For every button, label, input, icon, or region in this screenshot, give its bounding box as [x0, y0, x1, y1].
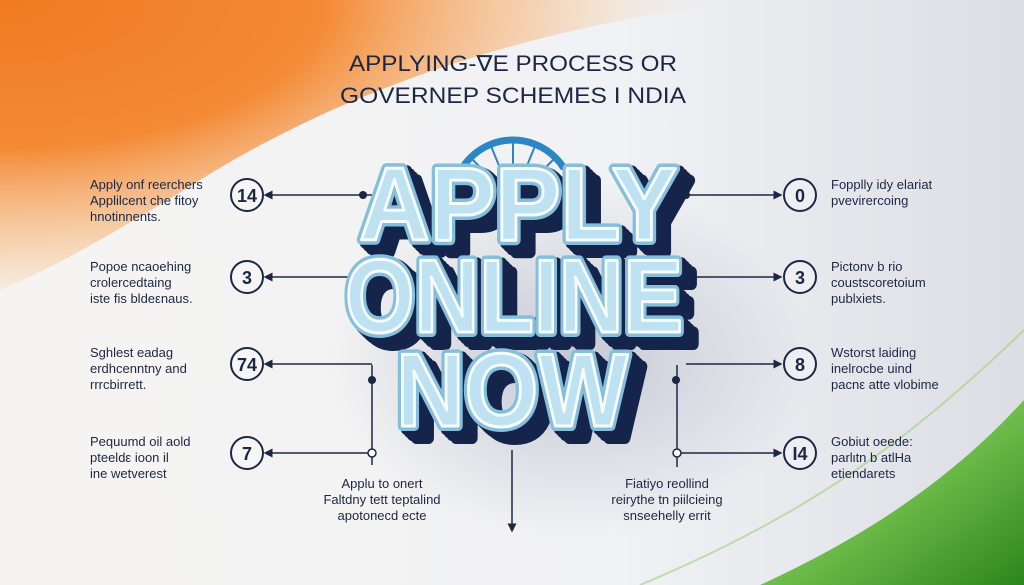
- headline: APPLY ONLINE NOW: ONLINE: [345, 239, 683, 355]
- left step texts: crolercedtaing: [90, 275, 172, 290]
- bottom texts: snseehelly errit: [623, 508, 711, 523]
- step numbers: 0: [795, 186, 805, 206]
- right step texts: Wstorst laiding: [831, 345, 916, 360]
- left step texts: ine wetverest: [90, 466, 167, 481]
- step circles: [231, 179, 816, 469]
- right step texts: publxiets.: [831, 291, 886, 306]
- right step texts: pacnε atte vlobime: [831, 377, 939, 392]
- headline: APPLY ONLINE NOW: NOW: [396, 333, 629, 449]
- bottom texts: reirythe tn piilcieing: [611, 492, 723, 507]
- right step texts: Fopplly idy elariat: [831, 177, 933, 192]
- step numbers: 3: [242, 268, 252, 288]
- step numbers: 3: [795, 268, 805, 288]
- left step texts: Apply onf reerchers: [90, 177, 203, 192]
- right step texts: inelrocbe uind: [831, 361, 912, 376]
- icon: ashoka chakra: [461, 136, 566, 170]
- left step texts: Sghlest eadag: [90, 345, 173, 360]
- headline: APPLY ONLINE NOW: ONLINE: [349, 242, 687, 358]
- left step texts: iste fis bldeεnaus.: [90, 291, 193, 306]
- left step texts: [90, 177, 203, 481]
- right step texts: etiendarets: [831, 466, 896, 481]
- headline: APPLY ONLINE NOW: ONLINE: [359, 251, 697, 367]
- step numbers: 7: [242, 444, 252, 464]
- headline: APPLY ONLINE NOW: NOW: [406, 342, 639, 458]
- right step texts: coustscoretoium: [831, 275, 926, 290]
- left step texts: Pequumd oil aold: [90, 434, 190, 449]
- connector lines: [268, 195, 778, 528]
- step numbers: [237, 186, 808, 464]
- orange swoosh: [0, 0, 760, 290]
- step numbers: 14: [237, 186, 257, 206]
- headline: APPLY ONLINE NOW: ONLINE: [355, 248, 693, 364]
- headline: APPLY ONLINE NOW: ONLINE: [345, 239, 683, 355]
- bottom texts: Faltdny tett teptalind: [323, 492, 441, 507]
- right step texts: Gobiut oeede:: [831, 434, 913, 449]
- headline: APPLY ONLINE NOW: APPLY: [366, 153, 684, 269]
- headline: APPLY ONLINE NOW: APPLY: [373, 159, 691, 275]
- headline: APPLY ONLINE NOW: ONLINE: [352, 245, 690, 361]
- step numbers: I4: [792, 444, 808, 464]
- bottom texts: [323, 476, 723, 523]
- bottom texts: Applu to onert: [342, 476, 423, 491]
- left step texts: erdhcenntny and: [90, 361, 187, 376]
- headline: APPLY ONLINE NOW: NOW: [400, 336, 633, 452]
- left step texts: Popoe ncaoehing: [90, 259, 191, 274]
- left step texts: pteeldε ioon il: [90, 450, 169, 465]
- right step texts: pvevirercoing: [831, 193, 908, 208]
- headline: APPLY ONLINE NOW: APPLY: [363, 150, 681, 266]
- step numbers: 8: [795, 355, 805, 375]
- headline: APPLY ONLINE NOW: [345, 147, 697, 461]
- right step texts: parlιtn b atlHa: [831, 450, 912, 465]
- title: GOVERNEP SCHEMES I NDIA: [340, 83, 686, 108]
- bottom texts: apotonecd ecte: [338, 508, 426, 523]
- step numbers: 74: [237, 355, 257, 375]
- right step texts: Pictonv b rio: [831, 259, 903, 274]
- headline: APPLY ONLINE NOW: NOW: [410, 345, 643, 461]
- green swoosh: [760, 400, 1024, 585]
- headline: APPLY ONLINE NOW: NOW: [403, 339, 636, 455]
- shadow under headline: [330, 180, 810, 540]
- left step texts: rrrcbirrett.: [90, 377, 146, 392]
- title: [340, 51, 686, 108]
- headline: APPLY ONLINE NOW: APPLY: [359, 147, 677, 263]
- right step texts: [831, 177, 939, 481]
- left step texts: hnotinnents.: [90, 209, 161, 224]
- headline: APPLY ONLINE NOW: APPLY: [369, 156, 687, 272]
- headline: APPLY ONLINE NOW: APPLY: [359, 147, 677, 263]
- left step texts: Applilcent che fitoy: [90, 193, 199, 208]
- headline: APPLY ONLINE NOW: NOW: [396, 333, 629, 449]
- title: APPLYING-∇E PROCESS OR: [349, 51, 677, 76]
- bottom texts: Fiatiyo reollind: [625, 476, 709, 491]
